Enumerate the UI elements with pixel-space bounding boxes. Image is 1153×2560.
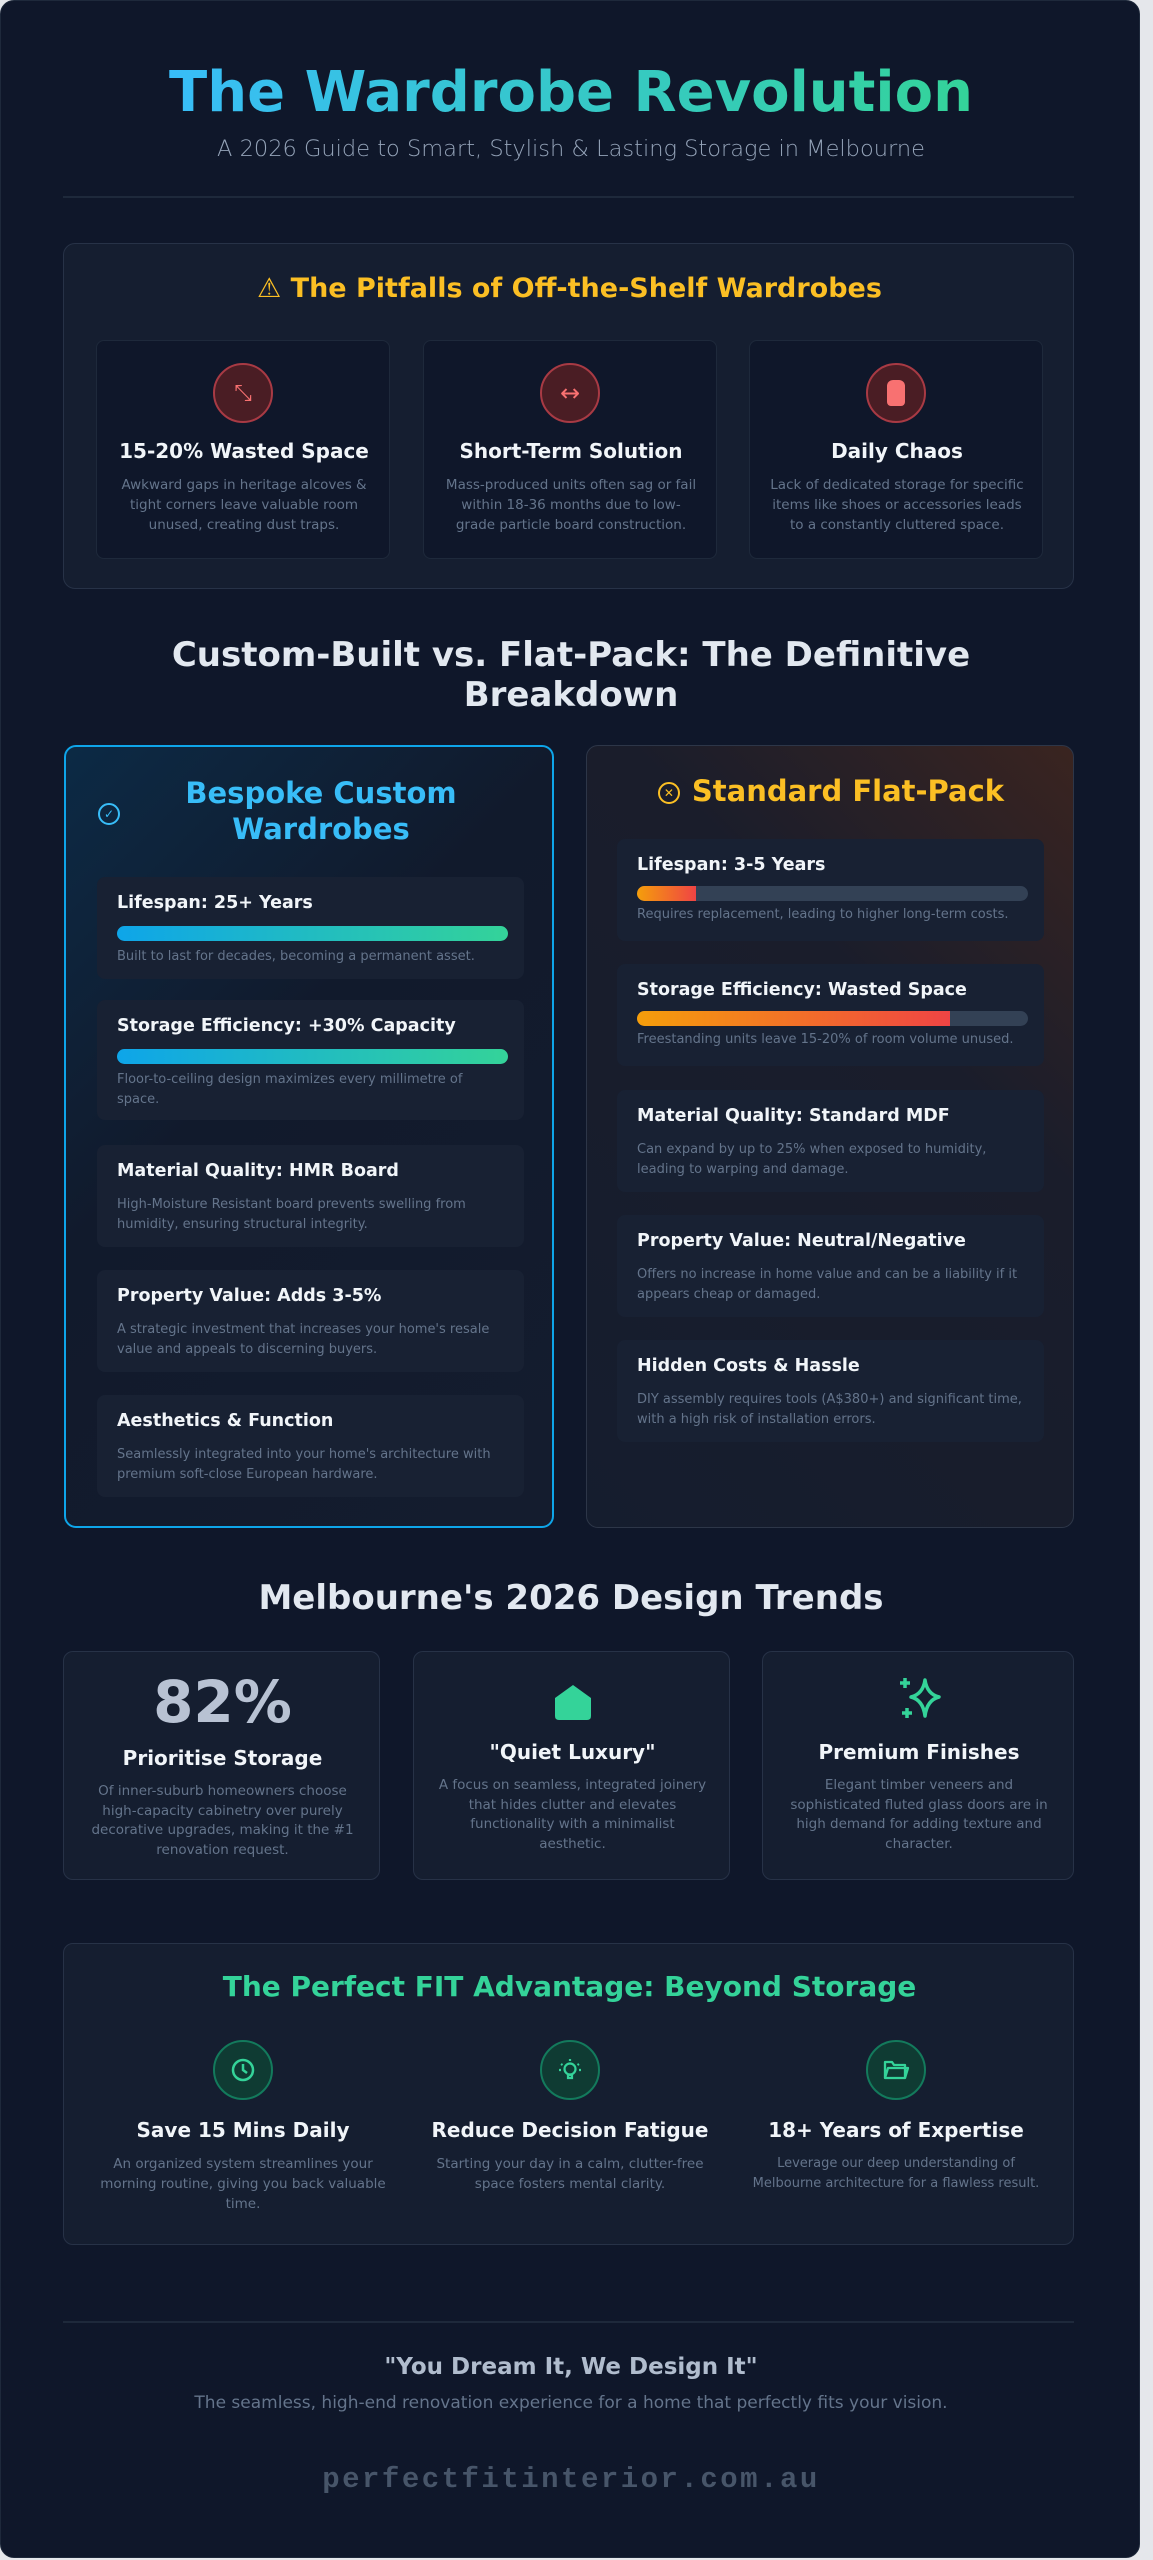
- row: lifespan: Built to last for decades, becoming a permanent asset.: [117, 949, 475, 964]
- heading: pitfalls: ⚠ The Pitfalls of Off-the-Shelf Wardrobes: [257, 273, 882, 304]
- row: lifespan: [97, 877, 524, 979]
- row: material: High-Moisture Resistant board prevents swelling from humidity, ensuring structural integrity.: [117, 1197, 466, 1232]
- item: decision fatigue: Reduce Decision Fatigue: [431, 2118, 708, 2142]
- row: storage: Floor-to-ceiling design maximizes every millimetre of space.: [117, 1072, 462, 1107]
- title: The Wardrobe Revolution: [169, 60, 973, 125]
- stat: 82%: 82%: [153, 1668, 292, 1736]
- row: storage: Storage Efficiency: Wasted Space: [637, 980, 967, 1000]
- row: aesthetics: Seamlessly integrated into your home's architecture with premium soft-close European hardware.: [117, 1447, 491, 1482]
- row: material: [617, 1090, 1044, 1192]
- heading: bespoke: Bespoke Custom: [185, 776, 457, 810]
- icon: check: [98, 803, 120, 825]
- row: property: A strategic investment that increases your home's resale value and appeals to discerning buyers.: [117, 1322, 489, 1357]
- item: expertise: [753, 2040, 1039, 2191]
- item: expertise: 18+ Years of Expertise: [768, 2118, 1024, 2142]
- footer domain: perfectfitinterior.com.au: [322, 2463, 820, 2496]
- row: storage: [617, 964, 1044, 1066]
- item: save time: Save 15 Mins Daily: [137, 2118, 349, 2142]
- icon: house: [555, 1685, 591, 1720]
- row: material: Can expand by up to 25% when exposed to humidity, leading to warping and damage.: [637, 1142, 986, 1177]
- icon: fist: [866, 363, 926, 423]
- icon: check: ✓: [104, 807, 114, 821]
- row: lifespan: Lifespan: 25+ Years: [117, 893, 313, 913]
- card: daily chaos: [749, 340, 1043, 559]
- panel: flat-pack: [586, 745, 1074, 1528]
- heading: comparison: Custom-Built vs. Flat-Pack: The Definitive: [172, 635, 970, 675]
- card: premium finishes: [762, 1651, 1074, 1880]
- row: property: Offers no increase in home value and can be a liability if it appears cheap or damaged.: [637, 1267, 1017, 1302]
- heading: trends: Melbourne's 2026 Design Trends: [258, 1578, 884, 1618]
- row: hidden costs: [617, 1340, 1044, 1442]
- row: property: [617, 1215, 1044, 1317]
- heading: comparison: Breakdown: [464, 675, 678, 715]
- card: daily chaos: Daily Chaos: [831, 439, 963, 463]
- card: short-term: [423, 340, 717, 559]
- panel: pitfalls: [63, 243, 1074, 589]
- card: 82%: [63, 1651, 380, 1880]
- item: decision fatigue: Starting your day in a calm, clutter-free space fosters mental clarity.: [436, 2156, 704, 2192]
- heading: bespoke: [185, 776, 457, 846]
- row: storage: Storage Efficiency: +30% Capacity: [117, 1016, 456, 1036]
- row: lifespan: Requires replacement, leading to higher long-term costs.: [637, 907, 1009, 922]
- item: save time: An organized system streamlines your morning routine, giving you back valuable time.: [100, 2156, 386, 2212]
- footer quote: "You Dream It, We Design It": [384, 2354, 758, 2380]
- card: short-term: Short-Term Solution: [459, 439, 683, 463]
- heading: bespoke: Wardrobes: [232, 812, 410, 846]
- row: storage: [97, 1000, 524, 1120]
- icon: sparkles: [900, 1678, 941, 1718]
- card: premium finishes: Premium Finishes: [818, 1740, 1020, 1764]
- subtitle: A 2026 Guide to Smart, Stylish & Lasting Storage in Melbourne: [217, 136, 925, 162]
- card: 82%: Of inner-suburb homeowners choose high-capacity cabinetry over purely decorative upgrades, making it the #1 renovation request.: [91, 1783, 354, 1858]
- row: lifespan: [617, 839, 1044, 941]
- card: wasted space: [96, 340, 390, 559]
- icon: bulb: [540, 2040, 600, 2100]
- row: hidden costs: DIY assembly requires tools (A$380+) and significant time, with a high risk of installation errors.: [637, 1392, 1022, 1427]
- item: decision fatigue: [431, 2040, 708, 2192]
- card: daily chaos: Lack of dedicated storage for specific items like shoes or accessories leads to a constantly cluttered space.: [770, 477, 1024, 533]
- card: 82%: Prioritise Storage: [123, 1746, 322, 1770]
- row: aesthetics: Aesthetics & Function: [117, 1411, 333, 1431]
- card: quiet luxury: "Quiet Luxury": [489, 1740, 656, 1764]
- icon: clock: [213, 2040, 273, 2100]
- row: aesthetics: [97, 1395, 524, 1497]
- row: property: Property Value: Neutral/Negative: [637, 1231, 966, 1251]
- card: quiet luxury: [413, 1651, 730, 1880]
- row: material: [97, 1145, 524, 1247]
- row: material: Material Quality: Standard MDF: [637, 1106, 950, 1126]
- heading: flat-pack: Standard Flat-Pack: [692, 774, 1004, 808]
- panel: bespoke: [64, 745, 554, 1528]
- icon: expand: [213, 363, 273, 423]
- row: property: [97, 1270, 524, 1372]
- card: wasted space: Awkward gaps in heritage alcoves & tight corners leave valuable room unused, creating dust traps.: [121, 477, 367, 533]
- row: lifespan: Lifespan: 3-5 Years: [637, 855, 825, 875]
- heading: comparison: [172, 635, 970, 715]
- row: storage: Freestanding units leave 15-20% of room volume unused.: [637, 1032, 1014, 1047]
- icon: arrows: ↔: [560, 379, 580, 407]
- card: premium finishes: Elegant timber veneers and sophisticated fluted glass doors are in high demand for adding texture and character.: [790, 1777, 1048, 1852]
- panel: advantage: [63, 1943, 1074, 2245]
- row: property: Property Value: Adds 3-5%: [117, 1286, 381, 1306]
- card: short-term: Mass-produced units often sag or fail within 18-36 months due to low-grade particle board construction.: [446, 477, 696, 533]
- icon: folder: [866, 2040, 926, 2100]
- row: material: Material Quality: HMR Board: [117, 1161, 399, 1181]
- item: save time: [100, 2040, 386, 2212]
- card: wasted space: 15-20% Wasted Space: [119, 439, 369, 463]
- item: expertise: Leverage our deep understanding of: [777, 2156, 1015, 2171]
- row: hidden costs: Hidden Costs & Hassle: [637, 1356, 860, 1376]
- icon: expand: ⤡: [234, 380, 252, 406]
- footer tagline: The seamless, high-end renovation experience for a home that perfectly fits your vision.: [194, 2393, 948, 2413]
- card: quiet luxury: A focus on seamless, integrated joinery that hides clutter and elevates functionality with a minimalist aesthetic.: [439, 1777, 706, 1852]
- heading: flat-pack: ✕: [664, 786, 674, 800]
- icon: arrows: [540, 363, 600, 423]
- item: expertise: Melbourne architecture for a flawless result.: [753, 2176, 1039, 2191]
- heading: advantage: The Perfect FIT Advantage: Beyond Storage: [223, 1970, 916, 2003]
